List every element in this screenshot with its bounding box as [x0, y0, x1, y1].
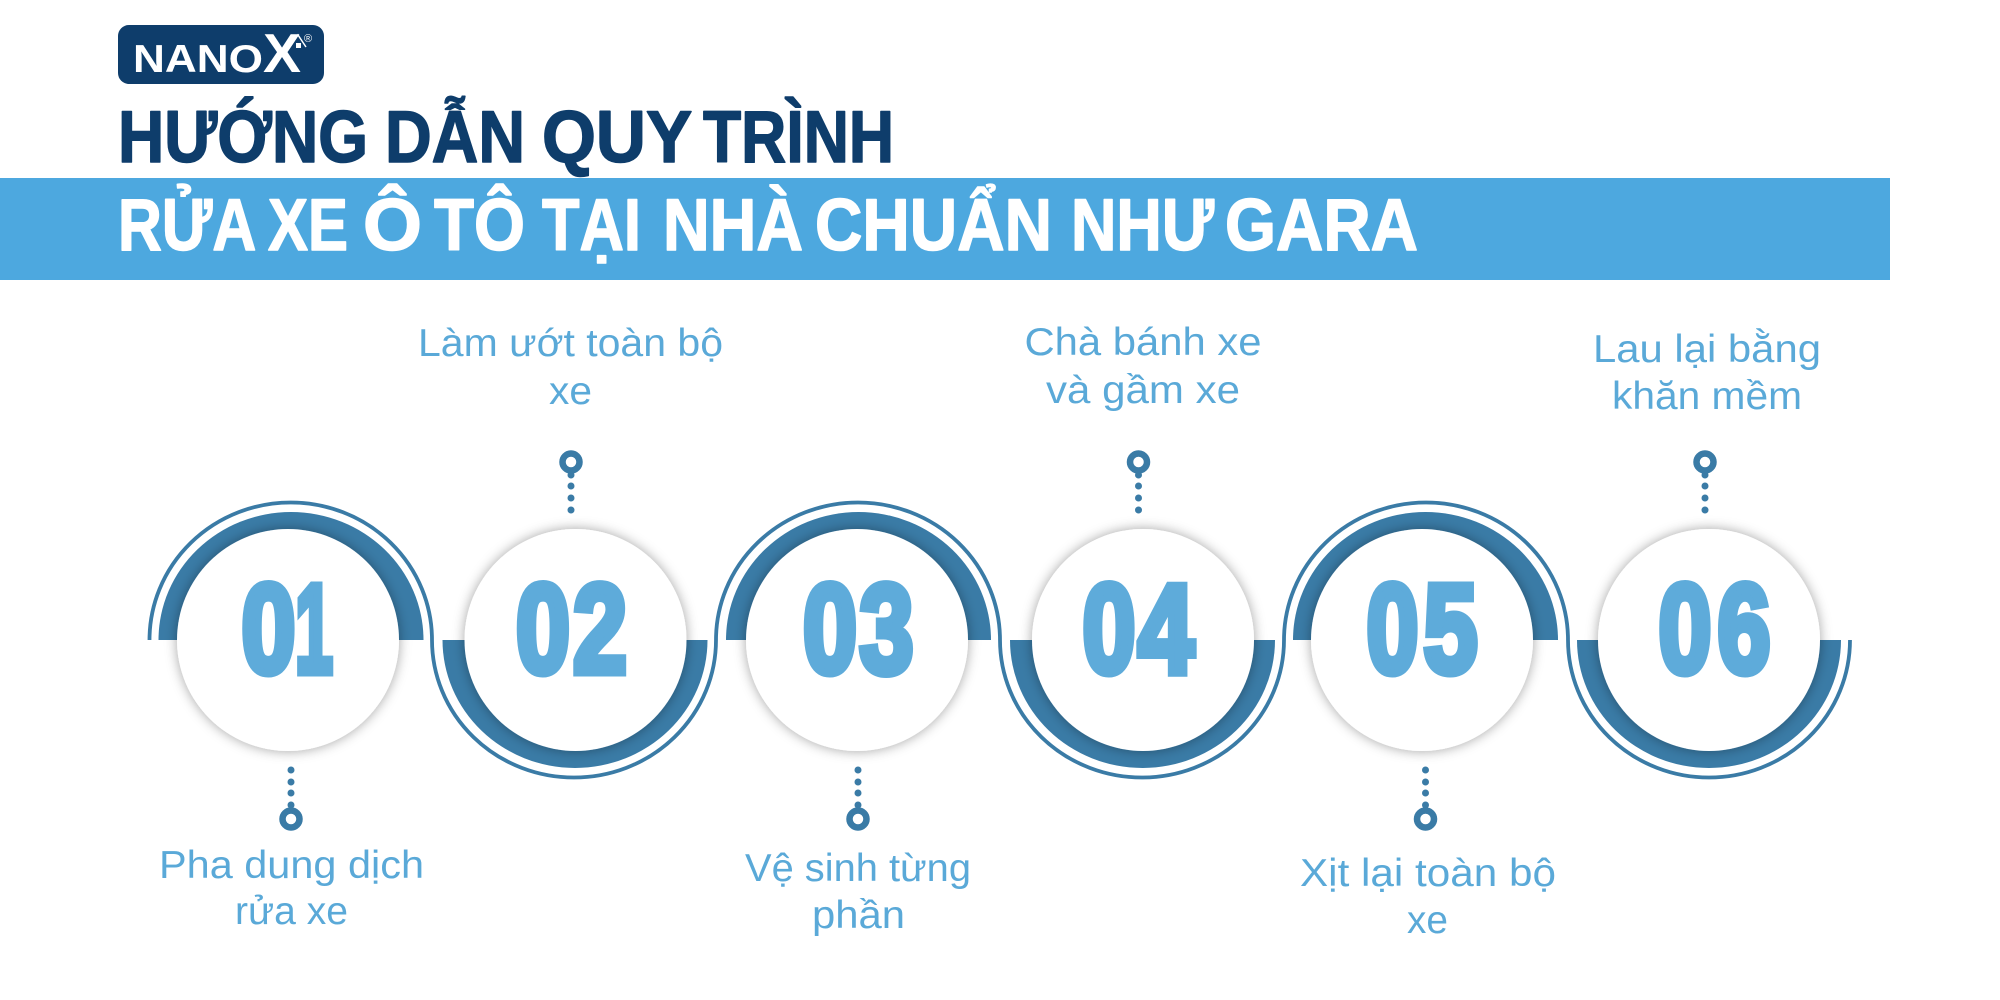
- label: step 06: [1593, 328, 1821, 418]
- step 04: 4: [1138, 558, 1194, 700]
- step 05: 5: [1424, 558, 1478, 700]
- title line 2: CHUẨN: [815, 185, 1052, 266]
- wavy thin connector line: [150, 502, 1850, 778]
- title line 2: TÔ: [434, 185, 525, 266]
- step 04: 0: [1082, 558, 1136, 700]
- logo: NanoX: ®: [304, 33, 312, 45]
- label: step 06: Lau lại bằng: [1593, 328, 1821, 371]
- pin: step 05: [1417, 766, 1434, 828]
- label: step 05: Xịt lại toàn bộ: [1300, 852, 1556, 895]
- title line 1: HƯỚNG: [118, 97, 368, 178]
- label: step 03: Vệ sinh từng: [745, 847, 971, 890]
- step 01: 1: [295, 558, 333, 700]
- label: step 04: và gầm xe: [1046, 369, 1240, 412]
- title line 2: NHÀ: [663, 185, 803, 266]
- label: step 05: [1300, 852, 1556, 942]
- label: step 01: rửa xe: [235, 890, 348, 933]
- pin: step 02: [562, 454, 580, 514]
- label: step 02: xe: [549, 370, 592, 413]
- step 02: 2: [573, 558, 627, 700]
- step 03: [726, 512, 991, 751]
- title line 2: RỬA: [118, 185, 255, 266]
- label: step 01: Pha dung dịch: [159, 844, 424, 887]
- title line 2: Ô: [363, 185, 422, 266]
- title line 2: GARA: [1225, 185, 1418, 266]
- label: step 02: Làm ướt toàn bộ: [418, 322, 723, 365]
- label: step 01: [159, 844, 424, 933]
- step 05: [1293, 512, 1558, 751]
- step 04: [1010, 529, 1275, 768]
- step 06: 0: [1658, 558, 1712, 700]
- title line 2: NHƯ: [1071, 185, 1214, 266]
- title banner: [0, 178, 1890, 280]
- step 01: 0: [242, 558, 296, 700]
- pin: step 04: [1130, 454, 1147, 514]
- logo: NanoX: NANO: [133, 38, 263, 81]
- title line 2: TẠI: [542, 185, 641, 266]
- step 06: 6: [1718, 558, 1770, 700]
- title line 2: XE: [268, 185, 348, 266]
- title line 1: DẪN: [385, 97, 525, 178]
- label: step 03: phần: [812, 894, 905, 937]
- step 06: [1577, 529, 1841, 768]
- step 02: 0: [516, 558, 570, 700]
- label: step 03: [745, 847, 971, 937]
- pin: step 01: [282, 766, 300, 828]
- label: step 06: khăn mềm: [1612, 375, 1802, 418]
- logo: NanoX: [118, 22, 324, 84]
- step 01: [158, 512, 424, 751]
- step 02: [442, 529, 708, 768]
- pin: step 06: [1696, 454, 1714, 514]
- title line 1: QUY: [542, 97, 692, 178]
- label: step 05: xe: [1407, 899, 1448, 942]
- label: step 02: [418, 322, 723, 413]
- label: step 04: [1024, 321, 1262, 412]
- pin: step 03: [850, 766, 866, 828]
- step 03: 3: [860, 558, 914, 700]
- title line 1: TRÌNH: [703, 97, 894, 178]
- step 03: 0: [803, 558, 857, 700]
- label: step 04: Chà bánh xe: [1024, 321, 1262, 364]
- step 05: 0: [1366, 558, 1418, 700]
- logo: NanoX: X: [263, 22, 301, 84]
